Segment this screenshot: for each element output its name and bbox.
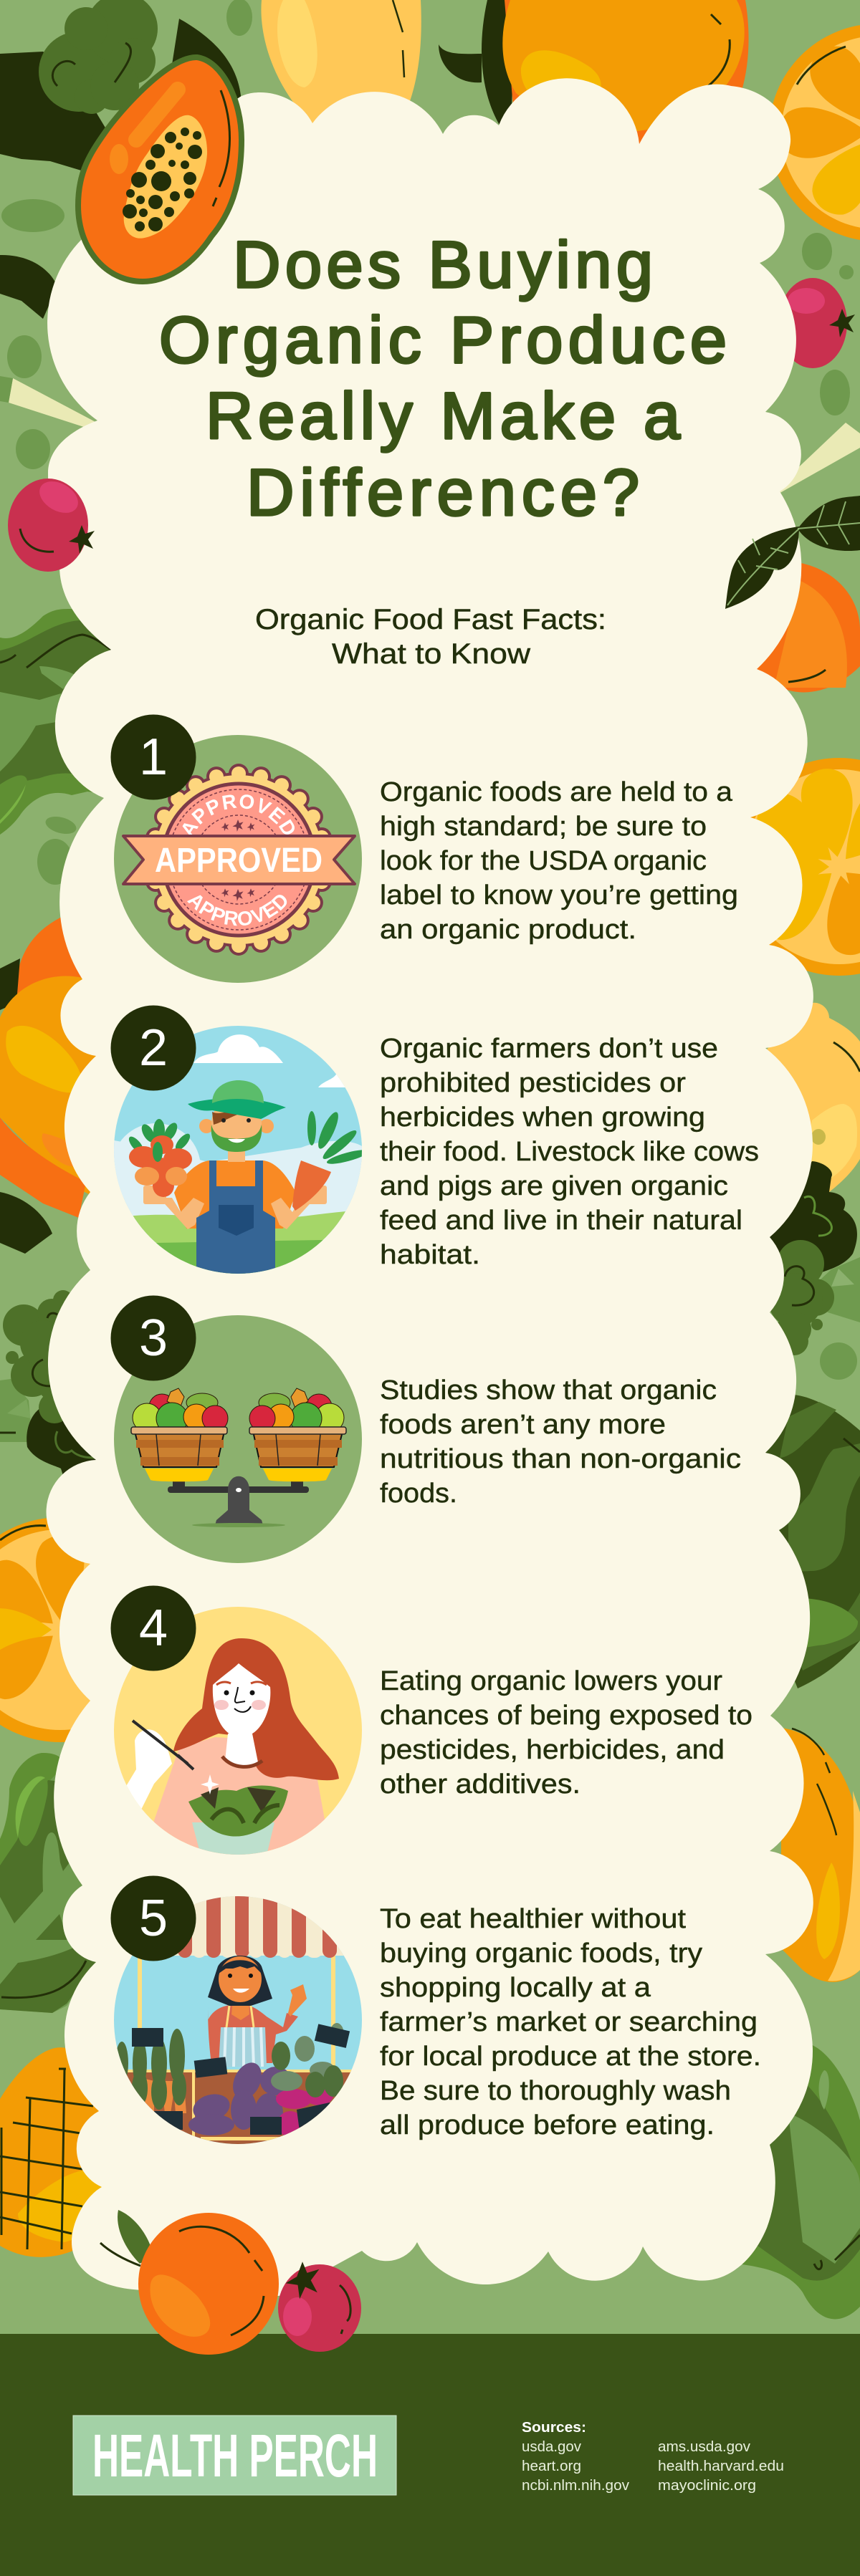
dark leaf left (0, 255, 57, 319)
footer band (0, 2334, 860, 2576)
left basket (131, 1388, 228, 1467)
item 2 text: herbicides when growing (380, 1102, 705, 1133)
leaf right bottom (738, 2043, 860, 2319)
number 1: 1 (139, 729, 168, 786)
dark leaf left lower (0, 1192, 52, 1254)
sources: usda.gov (522, 2439, 581, 2455)
shirt (152, 1737, 325, 1863)
title: Organic Produce (159, 304, 727, 377)
item 4 text: pesticides, herbicides, and (380, 1735, 725, 1765)
awning (174, 1896, 344, 1958)
item 5 text: for local produce at the store. (380, 2042, 761, 2072)
number 2: 2 (139, 1019, 168, 1077)
orange fruit left (0, 915, 122, 1218)
orange slice right (730, 758, 860, 976)
logo: Health Perch (73, 2416, 396, 2495)
pineapple left (0, 2047, 115, 2257)
head (199, 1119, 212, 1133)
item 5 text: shopping locally at a (380, 1973, 651, 2003)
bowl and salad (192, 1822, 274, 1855)
subtitle: What to Know (332, 638, 530, 670)
greens and beets (271, 2023, 344, 2137)
title: Difference? (247, 456, 639, 529)
sources: Sources: (522, 2420, 586, 2436)
stalks (9, 378, 97, 428)
item 1 text: Organic foods are held to a (380, 777, 733, 807)
logo: Health Perch: HEALTH PERCH (92, 2422, 378, 2489)
item 1 text (380, 777, 738, 945)
icon: tomato bottom (278, 2262, 361, 2352)
item 1 text: label to know you’re getting (380, 880, 738, 910)
item 3 image: balanced baskets on a scale (114, 1315, 362, 1563)
number 4 (110, 1586, 196, 1671)
number 5 (110, 1875, 196, 1961)
item 2 text (380, 1034, 759, 1270)
number 3: 3 (139, 1309, 168, 1367)
title: Does Buying (233, 229, 653, 302)
item 5 image: farmer's market stall (114, 1884, 362, 2145)
item 2 image: farmer (112, 1026, 370, 1275)
item 4 text: chances of being exposed to (380, 1701, 752, 1731)
broccoli right (768, 1161, 860, 1355)
arm and hand (126, 1729, 172, 1809)
item 1 image: approved badge: APPROVED (187, 895, 287, 926)
item 5 text (380, 1904, 761, 2140)
item 3 text: foods. (380, 1479, 457, 1509)
item 4 text: other additives. (380, 1769, 580, 1799)
sources: mayoclinic.org (658, 2478, 756, 2494)
scale (145, 1469, 332, 1527)
item 1 image: approved badge: APPROVED (155, 842, 322, 880)
spots (1, 0, 857, 1380)
item 5 text: farmer’s market or searching (380, 2007, 758, 2037)
item 2 text: and pigs are given organic (380, 1171, 728, 1201)
lemon right (745, 1003, 860, 1192)
item 5 text: To eat healthier without (380, 1904, 686, 1934)
sources: ncbi.nlm.nih.gov (522, 2478, 629, 2494)
yellow fruit top (261, 0, 421, 123)
item 2 text: their food. Livestock like cows (380, 1137, 759, 1167)
number 1 (110, 715, 196, 799)
item 3 text: foods aren’t any more (380, 1410, 666, 1440)
item 3 text (380, 1375, 741, 1509)
item 2 text: habitat. (380, 1240, 480, 1270)
item 4 image: woman eating salad (114, 1607, 362, 1863)
vendor (208, 1956, 307, 2067)
item 5 text: Be sure to thoroughly wash (380, 2076, 731, 2106)
item 2 text: feed and live in their natural (380, 1206, 742, 1236)
right basket (249, 1388, 346, 1467)
number 5: 5 (139, 1890, 168, 1947)
leaf top (172, 19, 242, 143)
subtitle: Organic Food Fast Facts: (255, 604, 606, 635)
overalls (196, 1160, 275, 1275)
orange slice left (0, 1517, 173, 1742)
item 4 text: Eating organic lowers your (380, 1666, 722, 1696)
face and neck (213, 1663, 270, 1737)
large leaf left upper (0, 609, 115, 835)
sources: health.harvard.edu (658, 2459, 784, 2474)
sources: ams.usda.gov (658, 2439, 750, 2455)
panel: cream scalloped background (47, 78, 813, 2296)
mango right (781, 1728, 860, 1982)
icon: leaves right (725, 496, 860, 609)
item 3 text: Studies show that organic (380, 1375, 717, 1405)
item 1 image: approved badge: APPROVED (182, 794, 295, 835)
icon: orange (100, 2210, 279, 2355)
item 1 text: an organic product. (380, 915, 636, 945)
orange right middle (757, 562, 860, 692)
item 1 text: high standard; be sure to (380, 812, 707, 842)
hair (173, 1638, 339, 1780)
eggplants (188, 2058, 292, 2135)
icon: papaya (78, 57, 242, 282)
farmer arms and shirt (174, 1160, 296, 1229)
title (159, 229, 727, 529)
carrots (115, 2029, 186, 2113)
item 1 text: look for the USDA organic (380, 846, 707, 876)
title: Really Make a (206, 380, 681, 453)
item 5 text: buying organic foods, try (380, 1938, 702, 1969)
broccoli left (0, 1290, 97, 1476)
item 4 text (380, 1666, 752, 1799)
item 2 text: Organic farmers don’t use (380, 1034, 718, 1064)
tomato right (778, 278, 855, 368)
icon: tomato left (8, 475, 95, 572)
orange fruit top right (439, 0, 749, 186)
stall (125, 2070, 351, 2144)
number 4: 4 (139, 1600, 168, 1657)
item 1 image: approved badge (114, 735, 362, 983)
large leaf left lower (0, 1753, 97, 2013)
orange slice top right (769, 24, 860, 241)
tomatoes bunch (126, 1119, 193, 1197)
number 2 (110, 1006, 196, 1090)
subtitle (255, 604, 606, 670)
number 3 (110, 1295, 196, 1381)
sources (522, 2420, 784, 2494)
price signs (132, 2024, 350, 2142)
leaf right middle (752, 1395, 860, 1688)
item 2 text: prohibited pesticides or (380, 1068, 686, 1098)
item 5 text: all produce before eating. (380, 2110, 715, 2140)
broccoli top left (0, 0, 158, 172)
sources: heart.org (522, 2459, 581, 2474)
carrot (292, 1111, 362, 1211)
item 3 text: nutritious than non-organic (380, 1444, 741, 1474)
